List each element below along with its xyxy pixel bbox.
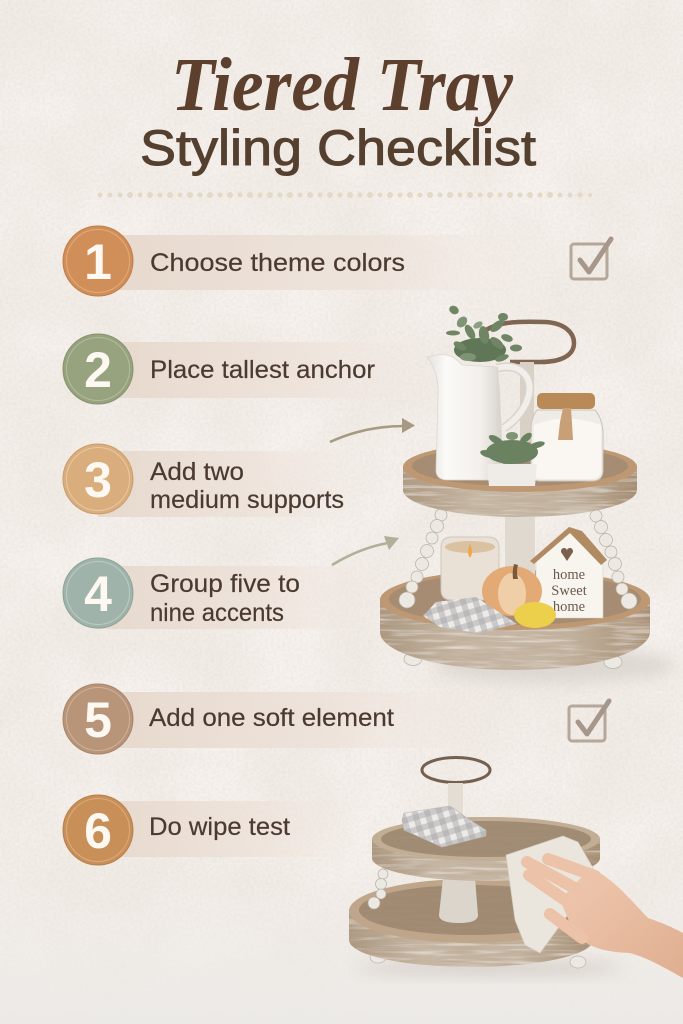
white pitcher — [427, 355, 530, 480]
house sign: home — [553, 567, 585, 583]
wipe tray feet — [370, 951, 586, 968]
pitcher greenery — [446, 304, 522, 363]
jar with lid — [531, 393, 603, 481]
cleaning cloth — [506, 836, 593, 953]
upper tier tray — [403, 442, 637, 517]
fingers — [527, 859, 595, 938]
upper post — [520, 362, 534, 442]
wipe center post — [439, 878, 478, 923]
folded gingham towel — [402, 806, 486, 847]
center post — [505, 515, 535, 585]
bead leg left — [399, 509, 447, 608]
dotted divider — [98, 192, 592, 198]
small potted plant — [479, 431, 546, 486]
step 2: place tallest anchor: Place tallest anchor — [150, 356, 375, 384]
step 3: add two medium supports: medium supports — [150, 486, 344, 514]
counter shadow — [355, 961, 625, 975]
title — [140, 43, 536, 176]
wipe test tray illustration — [349, 758, 683, 978]
step 4: group five to nine accents: Group five to — [150, 570, 300, 598]
step 2: place tallest anchor — [63, 334, 438, 404]
candle — [441, 537, 499, 600]
top handle — [482, 322, 574, 362]
step 4: group five to nine accents: nine accents — [150, 599, 284, 627]
ring handle — [422, 758, 490, 782]
title script line: Tiered Tray — [171, 43, 513, 127]
step 2: place tallest anchor: 2 — [84, 342, 112, 398]
step 6: do wipe test: 6 — [84, 803, 112, 859]
checkbox 2 — [569, 701, 609, 741]
hand and forearm — [527, 859, 683, 978]
upper neck — [448, 783, 463, 818]
house sign: home — [553, 599, 585, 615]
house sign — [530, 527, 607, 618]
house sign: Sweet — [551, 583, 587, 599]
styled two-tier tray illustration — [380, 304, 675, 683]
lower tier tray — [380, 570, 650, 670]
step 3: add two medium supports: Add two — [150, 458, 244, 486]
step 1: choose theme colors: 1 — [84, 234, 112, 290]
wipe bead leg — [368, 869, 388, 909]
lower tier feet — [404, 652, 622, 668]
wipe upper tray — [372, 817, 600, 881]
checkbox 1 — [571, 239, 611, 279]
bead leg right — [590, 510, 637, 609]
step 6: do wipe test: Do wipe test — [149, 813, 290, 841]
title subtitle line: Styling Checklist — [140, 120, 536, 176]
step 4: group five to nine accents — [63, 558, 383, 629]
tray shadow — [435, 647, 675, 683]
gingham napkin — [423, 597, 517, 633]
pumpkin — [482, 564, 542, 616]
step 4: group five to nine accents: 4 — [84, 566, 112, 622]
wipe lower tray — [349, 879, 593, 967]
step 3: add two medium supports: 3 — [84, 452, 112, 508]
arrow to lower tier — [332, 536, 399, 565]
arrow to upper tier — [330, 418, 415, 442]
step 6: do wipe test — [63, 795, 358, 865]
step 1: choose theme colors: Choose theme colors — [150, 249, 405, 277]
lemon — [514, 602, 556, 628]
step 5: add one soft element: Add one soft element — [149, 704, 394, 732]
palm and forearm — [560, 868, 683, 978]
step 5: add one soft element: 5 — [84, 692, 112, 748]
step 1: choose theme colors — [63, 226, 548, 296]
step 3: add two medium supports — [63, 444, 363, 517]
step 5: add one soft element — [63, 684, 493, 754]
